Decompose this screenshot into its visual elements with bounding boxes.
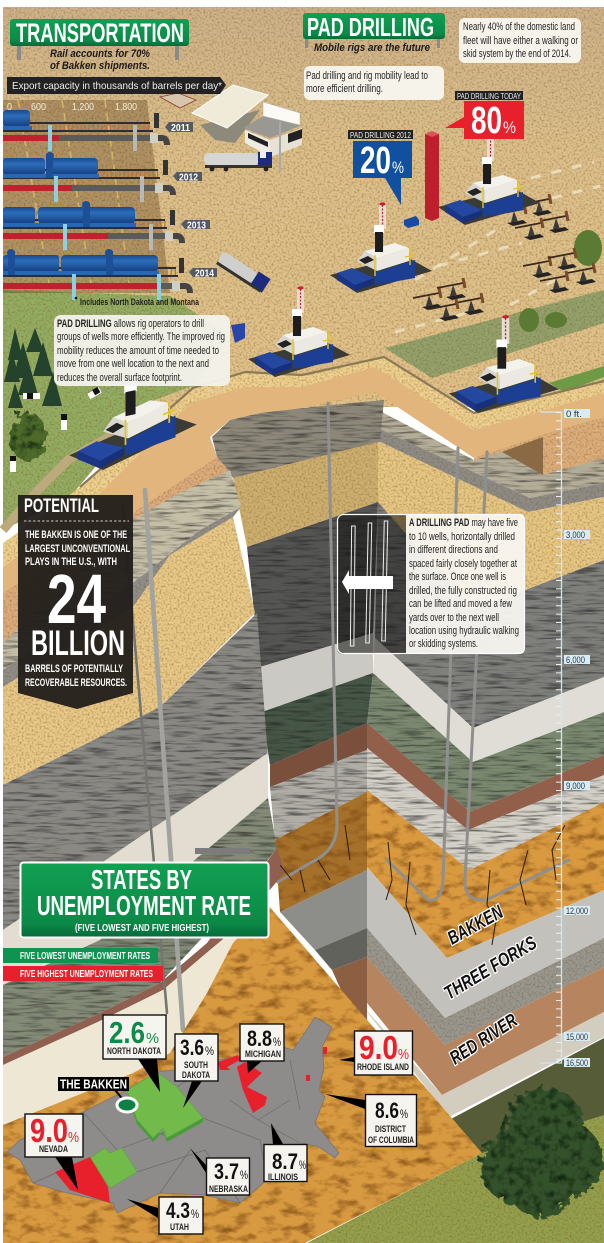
callout: Utah <box>127 1197 203 1234</box>
stratum: brown band <box>3 848 285 1065</box>
concrete paving tile rows <box>395 162 600 332</box>
callout: Nevada: NEVADA <box>39 1144 68 1154</box>
heading: states by unemployment rate: STATES BY <box>91 864 192 895</box>
marker: the Bakken: THE BAKKEN <box>60 1076 127 1092</box>
tank cars <box>3 201 136 227</box>
stratum: Bakken orange <box>367 790 604 958</box>
callout: South Dakota: SOUTH <box>184 1060 208 1070</box>
heading: states by unemployment rate <box>20 862 268 938</box>
bush: dark tree left <box>9 413 47 461</box>
panel intro: PLAYS IN THE U.S., WITH <box>25 556 117 568</box>
stratum: brown band <box>367 723 604 830</box>
callout: Nebraska <box>190 1148 250 1195</box>
panel outro <box>25 663 127 689</box>
depth scale <box>540 409 590 1069</box>
ground: dark olive pit <box>420 1038 604 1243</box>
chart title bar <box>7 77 226 94</box>
depth scale: 16,500 <box>566 1058 588 1069</box>
strata label: Red River: RED RIVER <box>446 1010 522 1069</box>
pine trees <box>4 328 62 408</box>
stratum: Red River brown <box>367 957 604 1095</box>
panel title: POTENTIAL <box>24 496 99 517</box>
axis labels: 1,200 <box>72 102 94 113</box>
tanker truck 2 <box>215 249 271 293</box>
pump sheds <box>160 93 196 108</box>
wall: top rubble <box>212 400 384 478</box>
store roof <box>243 115 302 138</box>
panel outro: RECOVERABLE RESOURCES. <box>25 677 127 689</box>
text block: to 10 wells, horizontally drilled <box>409 531 515 543</box>
US map <box>7 1017 339 1213</box>
stratum: white band <box>373 638 604 762</box>
axis labels: 1,800 <box>115 102 137 113</box>
store windows <box>248 133 268 147</box>
map: Rhode Island <box>323 1047 327 1054</box>
stratum: yellow sand <box>378 441 604 610</box>
white text side <box>406 514 525 654</box>
callout: North Dakota: % <box>146 1030 159 1047</box>
chart title bar: Export capacity in thousands of barrels per day* <box>12 80 222 92</box>
transportation chart background <box>3 100 170 293</box>
cavern inner left wall strata <box>212 400 384 1030</box>
callout: Michigan <box>240 1024 284 1073</box>
legend: five lowest: FIVE LOWEST UNEMPLOYMENT RATES <box>20 951 150 962</box>
depth scale: 15,000 <box>566 1032 588 1043</box>
text block: the surface. Once one well is <box>409 571 506 583</box>
map: state borders <box>33 1060 300 1203</box>
wall: orange band <box>275 792 367 912</box>
strata label: Three Forks: THREE FORKS <box>441 933 541 1004</box>
bush: right group <box>519 230 602 332</box>
ground: grass strip right <box>385 290 604 378</box>
stratum: green band <box>367 673 604 812</box>
ground: sandy plain <box>3 7 604 407</box>
callout: pad drilling 2012 20%: PAD DRILLING 2012 <box>350 130 411 140</box>
big number: 24 <box>47 560 106 638</box>
surface: top edge stripe <box>80 357 604 487</box>
orange map plane <box>3 905 482 1243</box>
legend: five lowest <box>3 948 158 963</box>
depth scale: 6,000 <box>566 655 585 666</box>
callout: Nebraska: NEBRASKA <box>209 1184 248 1194</box>
left block strata <box>3 457 285 1125</box>
bar: 20 percent <box>404 216 419 228</box>
gas station <box>160 85 302 172</box>
strata label: Bakken: BAKKEN <box>444 901 508 949</box>
stratum: white band <box>3 753 268 985</box>
row: 2014 capacity <box>3 249 217 300</box>
callout: Rhode Island: RHODE ISLAND <box>357 1062 409 1072</box>
year label: 2014 <box>195 268 214 280</box>
axis labels: 0 <box>7 102 12 113</box>
pumpjacks <box>413 194 596 321</box>
callout: North Dakota <box>103 1015 166 1092</box>
icon: three wells <box>350 521 388 646</box>
callout: Rhode Island: % <box>398 1046 409 1063</box>
text block: can be lifted and moved a few <box>409 598 512 610</box>
callout: District of Columbia: DISTRICT <box>375 1124 406 1134</box>
callout: North Dakota: 2.6 <box>109 1015 145 1050</box>
year label <box>170 210 210 232</box>
surface: tan notch shadow <box>502 437 543 475</box>
heading: states by unemployment rate: UNEMPLOYMENT RATE <box>37 890 251 921</box>
stratum: sandy orange <box>474 393 604 490</box>
ground: grass strip lower right <box>549 366 604 392</box>
callout: pad drilling today 80%: % <box>503 118 516 137</box>
row: 2013 capacity <box>3 201 210 250</box>
pipe: right well B <box>465 452 569 900</box>
grass foreground <box>307 1115 604 1243</box>
rail track <box>3 268 178 276</box>
year label <box>179 258 217 280</box>
wall: green band <box>262 673 373 765</box>
callout: Utah: 4.3 <box>166 1198 190 1223</box>
legend: five highest <box>3 966 163 981</box>
callout: Nebraska: % <box>240 1168 248 1182</box>
heading: pad drilling sign: PAD DRILLING <box>307 12 434 42</box>
note: rig mobility <box>304 66 444 100</box>
callout: Illinois: ILLINOIS <box>268 1172 298 1182</box>
callout: South Dakota: % <box>205 1044 214 1058</box>
callout: pad drilling today 80%: 80 <box>471 100 502 142</box>
rail track <box>3 220 167 228</box>
row: 2011 capacity <box>3 110 193 151</box>
capacity pipe <box>3 125 167 151</box>
note: pad drilling explanation: PAD DRILLING allows rig operators to drill <box>57 318 204 330</box>
callout: Rhode Island <box>339 1029 412 1075</box>
subheading: rail share <box>50 48 150 72</box>
surface: sand cap <box>3 357 604 567</box>
callout: Utah: UTAH <box>170 1222 189 1232</box>
panel intro: LARGEST UNCONVENTIONAL <box>25 543 130 555</box>
pipe: left cavern well <box>278 403 337 882</box>
cows <box>10 387 102 472</box>
store walls <box>245 130 270 157</box>
canopy shadow <box>200 110 260 143</box>
well pipes <box>123 403 569 1030</box>
map: high-rate state Michigan <box>218 1055 240 1070</box>
rig: left on grass <box>69 342 197 477</box>
callout: Nevada: % <box>68 1129 79 1146</box>
callout: pad drilling 2012 20% <box>348 130 413 205</box>
callout: Michigan: % <box>273 1035 281 1049</box>
rig: pad drilling today <box>438 134 540 225</box>
heading: transportation sign <box>10 18 189 60</box>
callout: pad drilling today 80% <box>445 91 524 142</box>
surface: tan band <box>3 367 604 593</box>
rail track <box>3 170 160 178</box>
marker: the Bakken <box>58 1076 137 1112</box>
callout: District of Columbia: OF COLUMBIA <box>368 1135 414 1145</box>
callout: Rhode Island: 9.0 <box>359 1029 398 1066</box>
callout: Michigan: 8.8 <box>247 1026 272 1051</box>
subheading: rail share: of Bakken shipments. <box>50 60 150 72</box>
depth scale: 12,000 <box>566 906 588 917</box>
callout: District of Columbia <box>325 1094 416 1146</box>
truck behind note <box>231 323 245 343</box>
footnote <box>75 297 200 308</box>
panel intro: THE BAKKEN IS ONE OF THE <box>25 529 127 541</box>
wall: yellow sand shadow <box>233 442 378 547</box>
tank car <box>3 110 32 130</box>
depth scale: 3,000 <box>566 530 585 541</box>
stratum: white gray band <box>367 748 604 870</box>
rig: front middle <box>248 286 350 377</box>
stratum: gravel <box>360 1003 604 1117</box>
row: 2012 capacity <box>3 152 202 202</box>
bakken cracks <box>280 825 565 945</box>
text block: location using hydraulic walking <box>409 625 519 637</box>
stratum: gray shale <box>375 502 604 728</box>
wall: brown <box>332 957 367 1030</box>
axis labels: 600 <box>31 102 46 113</box>
note: rig mobility: more efficient drilling. <box>306 83 383 95</box>
ground: dirt road <box>3 425 130 530</box>
text block: spaced fairly closely together at <box>409 558 517 570</box>
text block: yards over to the next well <box>409 612 499 624</box>
footnote: Includes North Dakota and Montana <box>80 297 200 308</box>
capacity pipe <box>3 176 173 202</box>
year label <box>154 113 193 134</box>
text block: or skidding systems. <box>409 638 478 650</box>
heading: transportation sign: TRANSPORTATION <box>16 18 184 48</box>
stratum: sandy orange <box>3 457 230 645</box>
panel: a drilling pad <box>337 514 525 654</box>
tank cars <box>3 152 99 178</box>
ground: grass left <box>3 290 228 530</box>
wall: white band <box>260 633 373 712</box>
note: pad drilling explanation: mobility reduces the amount of time needed to <box>57 345 219 357</box>
heading: pad drilling sign <box>303 12 445 48</box>
sign post bar <box>195 848 250 854</box>
tanker truck 1 <box>204 150 272 171</box>
map: high-rate state Nevada <box>55 1157 110 1203</box>
note: pad drilling explanation: move from one well location to the next and <box>57 358 209 370</box>
stratum: yellow sand <box>3 517 255 785</box>
stratum: rubble <box>378 410 604 498</box>
dark diagram side <box>337 514 406 654</box>
year label: 2012 <box>179 172 198 184</box>
canopy <box>192 85 268 128</box>
tree foreground <box>480 1087 603 1217</box>
stratum: green gray band <box>3 798 277 1057</box>
rail track <box>3 123 153 131</box>
map: District of Columbia <box>306 1075 310 1081</box>
stratum: gritty gray <box>378 428 604 512</box>
callout: Utah: % <box>191 1207 199 1221</box>
note: domestic land fleet <box>459 18 581 63</box>
text block: in different directions and <box>409 544 498 556</box>
wall: gray band <box>280 870 367 950</box>
map: national outline <box>7 1017 339 1213</box>
stratum: cream band <box>3 905 268 1125</box>
pipe: right well A <box>387 448 458 900</box>
year label: 2013 <box>187 220 206 232</box>
subheading: rail share: Rail accounts for 70% <box>50 48 150 60</box>
callout: South Dakota: 3.6 <box>180 1035 204 1060</box>
wall: dark concrete <box>315 928 367 970</box>
wall: light gray band <box>270 750 367 840</box>
bar: 80 percent <box>425 131 439 221</box>
note: pad drilling explanation: reduces the overall surface footprint. <box>57 372 182 384</box>
callout: Illinois: 8.7 <box>272 1149 298 1174</box>
depth labels <box>564 409 590 1067</box>
heading: states by unemployment rate: (FIVE LOWEST AND FIVE HIGHEST) <box>75 923 209 934</box>
callout: Illinois: % <box>299 1158 306 1172</box>
panel: potential <box>18 495 133 709</box>
subheading: mobile rigs: Mobile rigs are the future <box>314 42 430 54</box>
year label <box>163 160 202 184</box>
callout: Nevada: 9.0 <box>30 1112 68 1149</box>
callout: District of Columbia: % <box>400 1107 408 1121</box>
stratum: gray shale <box>3 613 268 930</box>
callout: pad drilling 2012 20%: 20 <box>360 140 391 182</box>
stratum: Three Forks gray <box>367 867 604 1018</box>
callout: pad drilling today 80%: PAD DRILLING TODAY <box>457 91 521 101</box>
panel outro: BARRELS OF POTENTIALLY <box>25 663 123 675</box>
callout: Michigan: MICHIGAN <box>245 1049 281 1059</box>
depth scale: 9,000 <box>566 781 585 792</box>
text block <box>409 517 519 650</box>
callout: District of Columbia: 8.6 <box>375 1098 399 1123</box>
tank cars <box>3 249 159 275</box>
pipe: left thick well <box>145 490 183 1030</box>
rig: front right corner <box>449 315 559 413</box>
note: rig mobility: Pad drilling and rig mobility lead to <box>306 70 428 82</box>
callout: South Dakota <box>175 1034 218 1108</box>
stratum: gritty gray <box>3 507 241 687</box>
stratum: concrete gray <box>367 928 604 1045</box>
pipe: left thin well <box>123 507 167 1013</box>
map: low-rate states Dakotas and Nebraska <box>127 1094 203 1142</box>
wall: brown band <box>270 723 367 787</box>
capacity pipe <box>3 274 190 300</box>
callout: South Dakota: DAKOTA <box>182 1070 210 1080</box>
callout: Nevada <box>25 1112 83 1190</box>
map: low-rate state Utah <box>90 1148 137 1188</box>
callout: pad drilling 2012 20%: % <box>392 158 404 177</box>
callout: North Dakota: NORTH DAKOTA <box>107 1046 161 1056</box>
chart grid lines <box>18 100 130 290</box>
year label: 2011 <box>171 123 190 134</box>
note: pad drilling explanation: groups of wells more efficiently. The improved rig <box>57 331 225 343</box>
panel intro <box>25 529 130 568</box>
text block: A DRILLING PAD may have five <box>409 517 518 529</box>
note: pad drilling explanation <box>54 315 230 386</box>
wall: dark shale <box>247 502 378 667</box>
capacity pipe <box>3 224 182 250</box>
axis labels <box>7 102 137 113</box>
depth scale: 0 ft. <box>566 409 582 420</box>
billboard and pole <box>263 102 300 125</box>
stratum: rubble <box>3 470 241 670</box>
right block: inner and outer strata <box>360 393 604 1117</box>
panel: potential: BILLION <box>31 624 125 663</box>
callout: Nebraska: 3.7 <box>214 1159 239 1184</box>
callout: Illinois <box>264 1123 307 1182</box>
legend: five highest: FIVE HIGHEST UNEMPLOYMENT RATES <box>20 969 153 980</box>
arrow: left <box>342 570 393 594</box>
text block: drilled, the fully constructed rig <box>409 585 517 597</box>
rig: pad drilling 2012 <box>330 202 432 293</box>
